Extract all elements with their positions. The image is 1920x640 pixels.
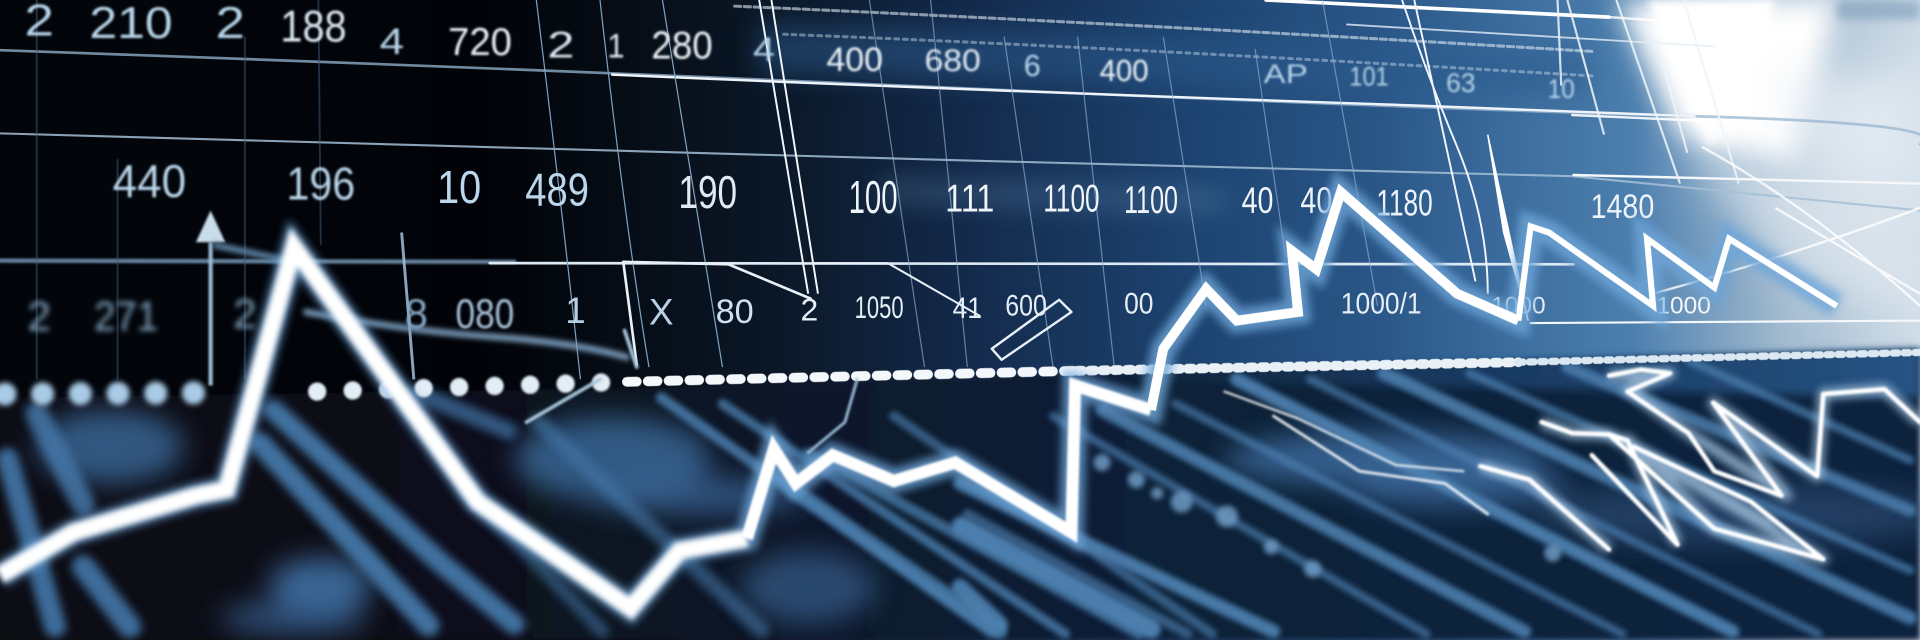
middle row numbers: 1480 bbox=[1591, 188, 1654, 226]
middle row numbers: 40 bbox=[1300, 180, 1332, 221]
top row numbers: 4 bbox=[753, 31, 775, 69]
lower row numbers: 1000 bbox=[1656, 292, 1711, 319]
top row numbers: 2 bbox=[547, 25, 574, 66]
lower row numbers: 80 bbox=[716, 293, 754, 331]
top row numbers: 400 bbox=[1100, 54, 1149, 88]
lower row numbers: 271 bbox=[94, 292, 158, 339]
lower row numbers: 8 bbox=[405, 290, 428, 337]
soft blue band behind top numbers bbox=[759, 24, 1592, 208]
top row numbers: 10 bbox=[1548, 74, 1575, 104]
thin secondary line chart bbox=[306, 262, 1071, 365]
middle row numbers: 100 bbox=[849, 171, 898, 223]
middle row numbers: 440 bbox=[113, 155, 186, 207]
right zigzag chart: outer glow bbox=[1480, 373, 1920, 559]
lower perspective floor bbox=[0, 349, 1920, 640]
lower row numbers: 1050 bbox=[855, 289, 904, 325]
middle row numbers: 1180 bbox=[1376, 182, 1433, 223]
lower row numbers bbox=[28, 287, 1711, 339]
lower row numbers: X bbox=[649, 291, 673, 332]
diagonal floor stripes: left bbox=[7, 393, 762, 631]
diagonal floor stripes: right bbox=[960, 361, 1910, 634]
lower row numbers: 00 bbox=[1124, 287, 1153, 320]
lower row numbers: 41 bbox=[953, 292, 982, 325]
top row numbers: 210 bbox=[89, 0, 173, 48]
top row numbers: 2 bbox=[216, 0, 245, 48]
top row numbers: 6 bbox=[1024, 49, 1041, 83]
top row numbers: 188 bbox=[280, 3, 347, 52]
top row numbers: AP bbox=[1264, 59, 1308, 89]
top row numbers bbox=[24, 0, 1575, 104]
lower row numbers: 1 bbox=[565, 290, 586, 331]
blue band under dashes on the right bbox=[1078, 349, 1920, 398]
horizontal grid lines bbox=[0, 0, 1920, 323]
dotted row of data marks bbox=[5, 352, 1920, 394]
blurred blue patches on floor bbox=[37, 410, 1920, 635]
top row numbers: 680 bbox=[924, 42, 981, 78]
thin branches over floor bbox=[527, 330, 857, 453]
middle row numbers: 196 bbox=[287, 157, 355, 209]
thin arrow and axis marker bbox=[196, 210, 306, 385]
middle row numbers: 1100 bbox=[1043, 178, 1100, 221]
middle row numbers: 40 bbox=[1242, 180, 1273, 221]
lower row numbers: 080 bbox=[456, 290, 514, 337]
middle row numbers: 190 bbox=[678, 166, 737, 218]
floor bokeh dots bbox=[1093, 454, 1561, 578]
lower row numbers: 1000/1 bbox=[1341, 287, 1422, 320]
right zigzag chart bbox=[1224, 370, 1920, 559]
main white trend line: glow bbox=[0, 192, 1837, 608]
top row numbers: 4 bbox=[380, 21, 404, 62]
vertical grid lines bbox=[37, 0, 1920, 379]
diagonal floor stripes: centre bbox=[661, 398, 1212, 634]
middle row numbers: 1100 bbox=[1124, 179, 1178, 222]
middle row numbers: 489 bbox=[525, 164, 589, 216]
main white trend line bbox=[0, 192, 1837, 608]
middle row numbers bbox=[113, 155, 1654, 226]
top right white glare bbox=[1616, 0, 1920, 318]
top row numbers: 400 bbox=[827, 41, 883, 79]
top row numbers: 1 bbox=[607, 28, 624, 66]
top row numbers: 63 bbox=[1446, 68, 1476, 98]
lower row numbers: 600 bbox=[1005, 290, 1047, 323]
lower row numbers: 2 bbox=[233, 290, 256, 337]
middle row numbers: 111 bbox=[945, 178, 994, 221]
lower row numbers: 2 bbox=[28, 292, 51, 339]
lower row numbers: 1000 bbox=[1491, 292, 1546, 319]
top row numbers: 720 bbox=[448, 21, 512, 64]
top row numbers: 280 bbox=[651, 25, 713, 68]
lower row numbers: 2 bbox=[801, 292, 818, 328]
middle row numbers: 10 bbox=[437, 161, 481, 213]
top row numbers: 101 bbox=[1349, 62, 1389, 92]
